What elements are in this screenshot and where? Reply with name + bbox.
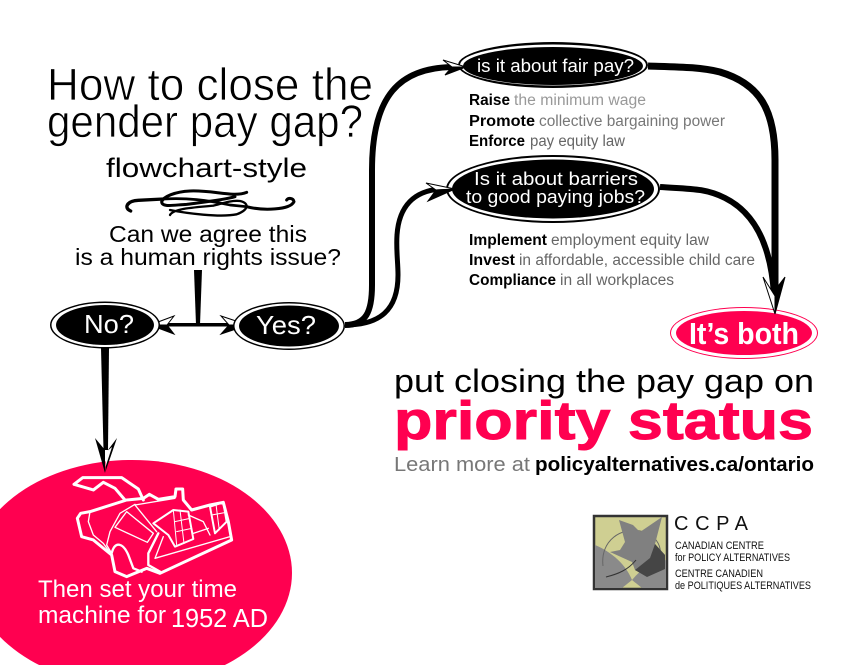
- arrow: into it's both: [763, 277, 785, 314]
- node: barriers: to good paying jobs?: [466, 187, 645, 207]
- question: human rights: Can we agree this: [109, 221, 307, 247]
- arrow: into time machine: [95, 438, 117, 473]
- list: fair pay actions: [469, 92, 725, 150]
- list: fair pay actions: pay equity law: [530, 133, 626, 150]
- connector: yes to fair pay: [345, 67, 452, 325]
- call to action: Learn more at: [394, 454, 530, 476]
- ornament flourish: [127, 191, 294, 216]
- subtitle: flowchart-style: [106, 153, 307, 183]
- logo text: de POLITIQUES ALTERNATIVES: [675, 580, 811, 592]
- title: [47, 59, 373, 147]
- call to action: policyalternatives.ca/ontario: [535, 454, 814, 476]
- node: No: [50, 302, 160, 348]
- call to action: priority status: [394, 391, 813, 451]
- node: fair pay: is it about fair pay?: [477, 56, 634, 76]
- node: barriers: Is it about barriers: [474, 169, 638, 189]
- call to action: [394, 363, 814, 476]
- logo text: [674, 513, 811, 592]
- connector: barriers to both: [660, 187, 774, 295]
- time machine caption: machine for: [38, 602, 166, 629]
- logo text: for POLICY ALTERNATIVES: [675, 552, 790, 564]
- arrow: to fair pay: [443, 60, 466, 75]
- list: barrier actions: Invest: [469, 252, 515, 269]
- arrow: to Yes: [221, 316, 248, 334]
- list: fair pay actions: the minimum wage: [514, 92, 646, 109]
- list: fair pay actions: collective bargaining power: [539, 113, 725, 130]
- node: Yes: Yes?: [256, 310, 316, 340]
- title: How to close the: [47, 59, 373, 110]
- node: No: No?: [84, 309, 134, 339]
- connector: fair pay to both: [648, 66, 775, 295]
- list: barrier actions: in affordable, accessible child care: [519, 252, 755, 269]
- time machine caption: Then set your time: [38, 576, 237, 603]
- logo mark: CCPA maple leaf: [594, 516, 667, 589]
- logo text: CCPA: [674, 513, 749, 535]
- arrow: to barriers: [426, 183, 455, 201]
- node: fair pay: [458, 42, 648, 88]
- time machine caption: [38, 576, 268, 633]
- connector: no down: [101, 348, 109, 450]
- title: gender pay gap?: [47, 96, 363, 147]
- question: human rights: is a human rights issue?: [75, 244, 341, 270]
- node: it's both: It’s both: [689, 316, 799, 351]
- list: fair pay actions: Enforce: [469, 133, 525, 150]
- time machine panel: [0, 460, 292, 665]
- list: barrier actions: Compliance: [469, 272, 556, 289]
- list: barrier actions: [469, 232, 755, 289]
- connector: yes to barriers: [345, 189, 440, 325]
- list: fair pay actions: Raise: [469, 92, 510, 109]
- arrow: to No: [150, 316, 174, 334]
- stem and branch connector: [160, 270, 235, 326]
- question: human rights: [75, 221, 341, 270]
- time machine caption: 1952 AD: [171, 603, 268, 633]
- call to action: put closing the pay gap on: [394, 363, 814, 399]
- node: Yes: [233, 302, 345, 350]
- icon: DeLorean car: [74, 478, 232, 577]
- list: fair pay actions: Promote: [469, 113, 535, 130]
- list: barrier actions: in all workplaces: [560, 272, 674, 289]
- list: barrier actions: employment equity law: [551, 232, 710, 249]
- logo text: CANADIAN CENTRE: [675, 540, 764, 552]
- node: it's both: [670, 307, 818, 359]
- node: barriers: [446, 155, 660, 223]
- logo text: CENTRE CANADIEN: [675, 568, 763, 580]
- list: barrier actions: Implement: [469, 232, 547, 249]
